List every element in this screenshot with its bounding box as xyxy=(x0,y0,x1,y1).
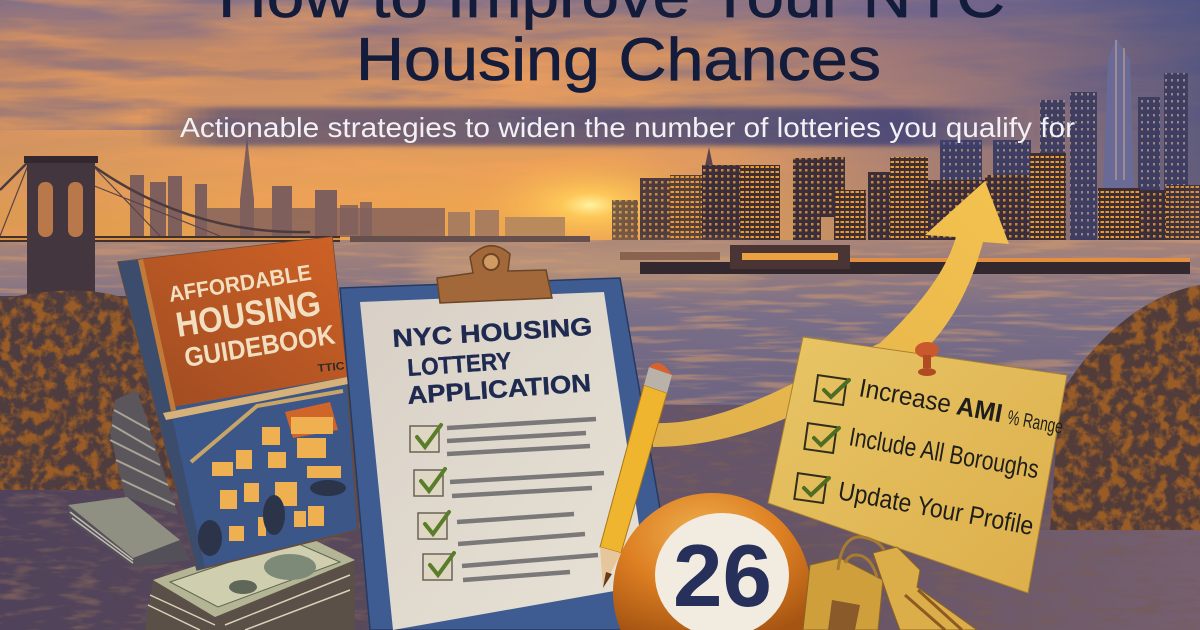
stack: low bundle xyxy=(68,497,190,567)
book title: GUIDEBOOK xyxy=(182,319,338,373)
book title: HOUSING xyxy=(173,284,323,345)
book title: AFFORDABLE xyxy=(167,260,313,307)
sky background xyxy=(0,0,1200,260)
clipboard heading: LOTTERY xyxy=(407,348,512,382)
title xyxy=(218,0,1005,93)
lottery ball: 26 xyxy=(673,526,772,625)
autumn foliage and ground xyxy=(0,285,1200,630)
note checklist: Increase xyxy=(857,372,954,419)
clipboard heading xyxy=(392,313,593,410)
pin xyxy=(915,342,939,376)
clipboard heading: NYC HOUSING xyxy=(392,313,593,353)
pencil xyxy=(600,363,672,588)
clipboard heading: APPLICATION xyxy=(406,369,592,410)
note checklist: Include All Boroughs xyxy=(847,421,1041,484)
note checklist: Update Your Profile xyxy=(836,475,1036,541)
clip xyxy=(437,246,552,303)
book title: TTIC xyxy=(317,360,345,375)
note checklist: AMI xyxy=(954,390,1005,428)
river xyxy=(0,236,1200,420)
stack: upper bundle xyxy=(110,390,178,515)
checklist xyxy=(410,419,604,580)
book: Affordable Housing Guidebook xyxy=(118,237,358,570)
title: Housing Chances xyxy=(356,26,881,93)
stack: front bundle xyxy=(145,532,355,630)
building illustration xyxy=(191,391,353,556)
right skyline xyxy=(612,38,1200,260)
clipboard xyxy=(340,246,662,630)
rising arrow xyxy=(653,181,1009,447)
cash stacks xyxy=(68,390,355,630)
lottery ball xyxy=(613,493,811,630)
note checklist: % Range xyxy=(1006,407,1065,439)
note checklist xyxy=(836,372,1066,541)
subtitle banner: Actionable strategies to widen the number of lotteries you qualify for xyxy=(180,112,1075,143)
left skyline xyxy=(130,137,565,237)
book title xyxy=(167,260,345,375)
brooklyn bridge xyxy=(0,156,340,296)
keys xyxy=(803,537,977,630)
sticky note xyxy=(768,337,1067,593)
